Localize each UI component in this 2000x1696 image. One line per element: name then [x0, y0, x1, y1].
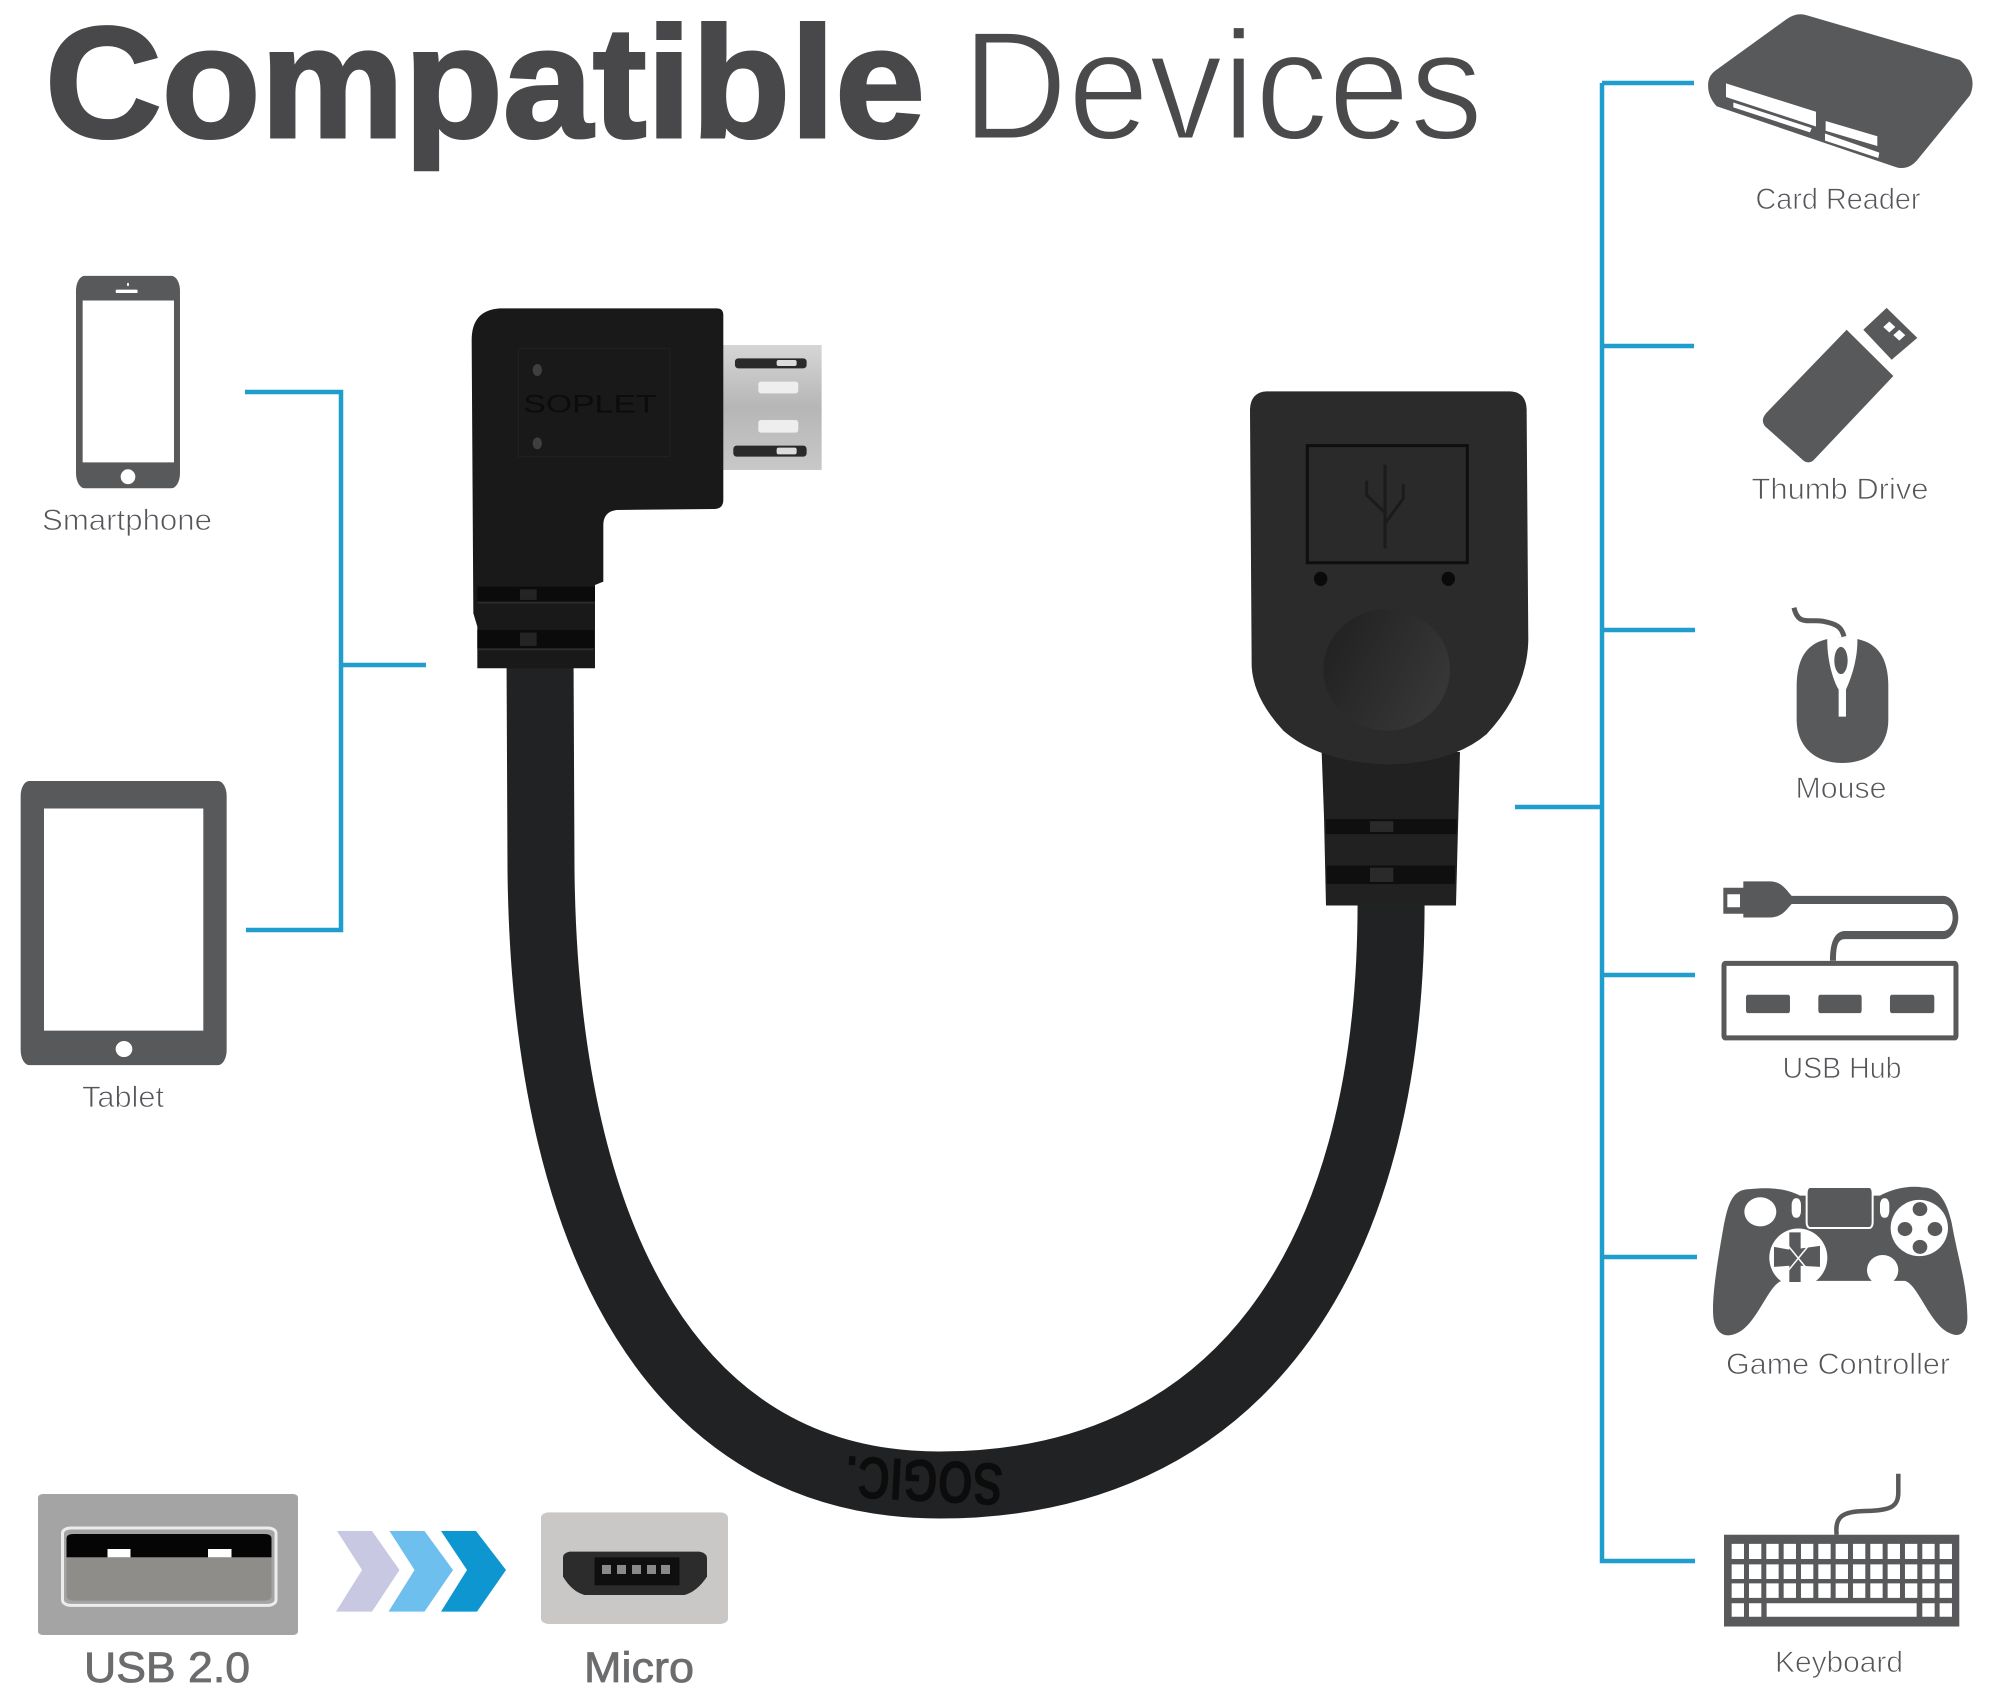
icon: card reader	[1708, 14, 1973, 168]
icon: mouse	[1794, 608, 1888, 763]
icon: USB hub	[1723, 881, 1958, 1038]
label: thumb drive: Thumb Drive	[1752, 473, 1928, 506]
icon: smartphone	[76, 276, 180, 488]
label: mouse: Mouse	[1796, 772, 1886, 805]
embossed panel: SOPLET	[523, 391, 657, 419]
cable logo: SOGIC.	[843, 1443, 1005, 1518]
title	[45, 0, 1483, 172]
holes	[1314, 572, 1455, 586]
thumb dome	[1323, 609, 1450, 731]
title: Compatible	[45, 0, 925, 171]
USB-A female connector	[1250, 391, 1528, 906]
strain relief ribs	[477, 587, 595, 650]
label: Micro: Micro	[584, 1644, 694, 1692]
icon: thumb drive	[1763, 308, 1917, 462]
label: USB hub: USB Hub	[1782, 1052, 1902, 1085]
body	[1322, 752, 1460, 906]
icon: tablet	[21, 781, 227, 1065]
USB trident symbol	[1367, 465, 1403, 548]
panel: USB 2.0 port	[38, 1494, 298, 1635]
label: card reader: Card Reader	[1756, 183, 1920, 216]
left connector lines	[245, 392, 426, 930]
label: game controller: Game Controller	[1726, 1348, 1950, 1381]
label: smartphone: Smartphone	[42, 504, 212, 537]
icon: game controller	[1713, 1187, 1967, 1335]
ribs	[1326, 819, 1457, 884]
metal tip	[722, 345, 822, 470]
panel: micro USB port	[541, 1512, 728, 1624]
cable	[540, 650, 1391, 1485]
label: tablet: Tablet	[82, 1081, 165, 1114]
micro USB right-angle connector	[472, 308, 822, 668]
title: Devices	[962, 0, 1483, 172]
label: keyboard: Keyboard	[1775, 1646, 1903, 1679]
embossed panel	[518, 348, 670, 457]
arrow: chevrons	[336, 1531, 506, 1612]
label: USB 2.0: USB 2.0	[84, 1644, 250, 1692]
right connector lines	[1515, 83, 1697, 1561]
label recess	[1307, 446, 1467, 563]
icon: keyboard	[1724, 1474, 1959, 1627]
plug body	[472, 308, 723, 668]
